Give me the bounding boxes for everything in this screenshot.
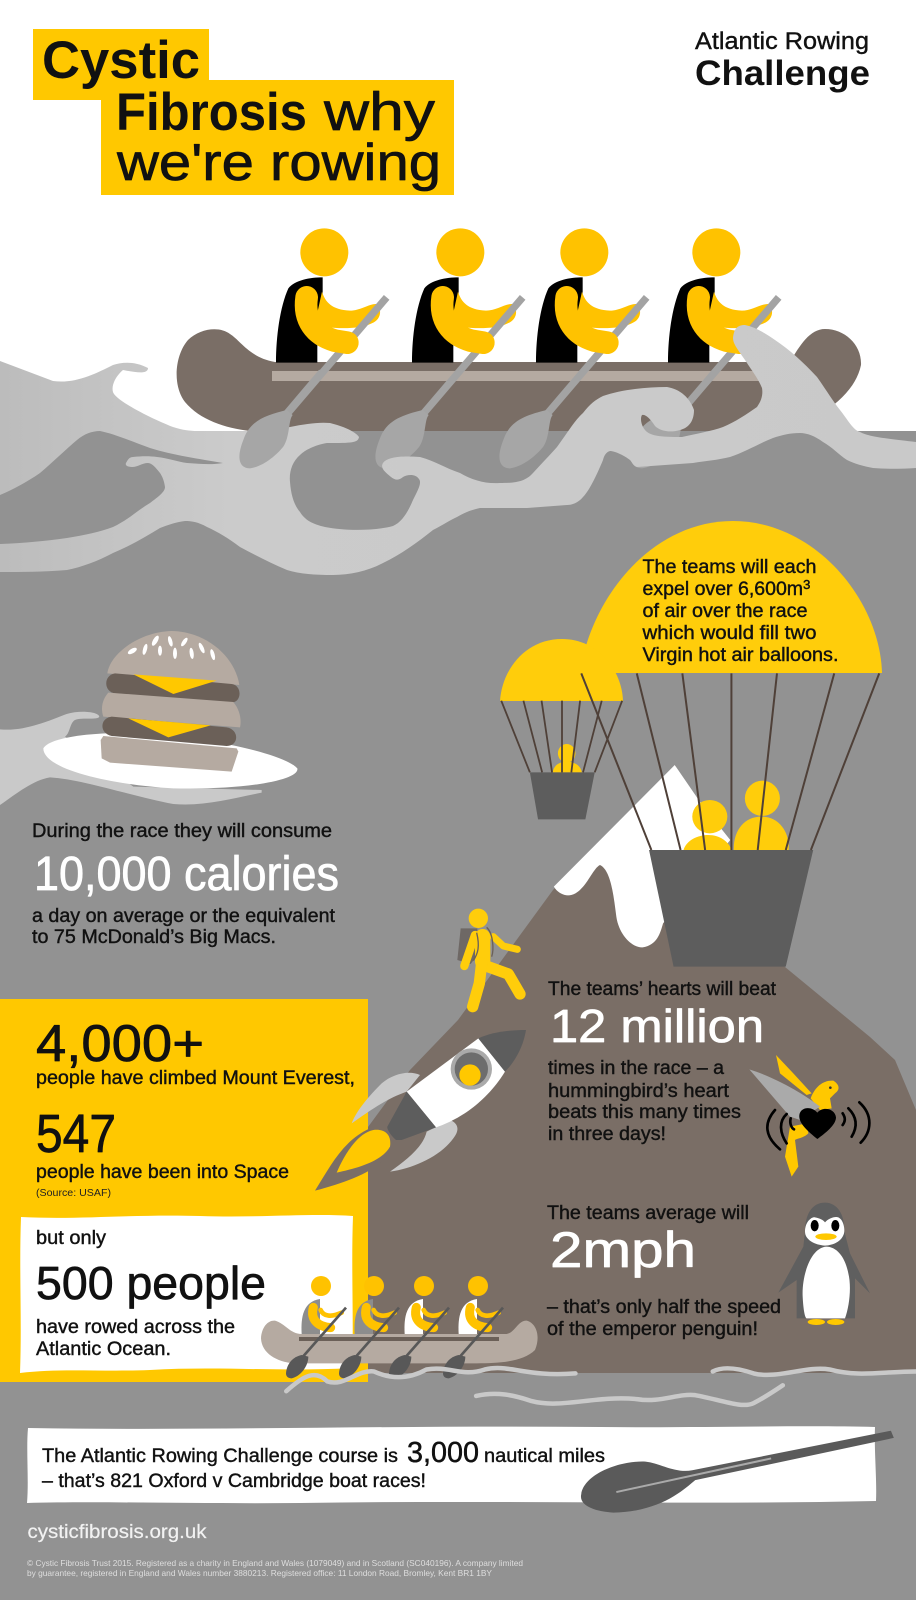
heading: Atlantic Rowing Challenge xyxy=(695,28,870,93)
balloon text: expel over 6,600m xyxy=(642,579,799,600)
panel: course distance banner xyxy=(27,1426,894,1513)
boat bench xyxy=(272,371,762,381)
white note: Atlantic: but only xyxy=(36,1228,107,1249)
text: heart beats: 12 million xyxy=(550,1000,764,1052)
icon: hiker xyxy=(457,909,520,1007)
waves xyxy=(0,325,916,575)
balloon text: Virgin hot air balloons. xyxy=(642,645,838,666)
white note: Atlantic: 500 people xyxy=(36,1257,266,1309)
title: Cystic Fibrosis: Cystic xyxy=(42,31,200,90)
title: why we're rowing xyxy=(116,82,441,192)
text: Everest: 4,000+ xyxy=(36,1015,204,1073)
white note: Atlantic xyxy=(20,1215,353,1373)
small boat with rowers xyxy=(261,1276,538,1378)
text: heart beats: The teams’ hearts will beat xyxy=(548,979,777,1000)
balloon text: The teams will each xyxy=(642,557,816,578)
panel: rowing boat on stormy waves xyxy=(0,228,916,575)
balloon ropes xyxy=(501,673,879,850)
panel: course distance banner: nautical miles xyxy=(484,1446,605,1467)
legal footer: by guarantee, registered in England and Wales number 3880213. Registered office: 11 London Road, Bromley, Kent BR1 1BY xyxy=(27,1568,492,1578)
text: calories xyxy=(32,821,339,948)
big balloon canopy xyxy=(580,521,882,673)
white note: Atlantic: have rowed across the xyxy=(36,1317,235,1338)
text: Everest xyxy=(36,1015,355,1089)
small balloon canopy xyxy=(500,639,623,701)
title block xyxy=(33,29,454,195)
icon: oar xyxy=(581,1431,894,1513)
water ripples xyxy=(286,1368,916,1405)
balloon text: 3 xyxy=(803,577,810,592)
panel: course distance banner: The Atlantic Rowing Challenge course is xyxy=(42,1446,398,1467)
page background xyxy=(0,431,916,1600)
white note: Atlantic: Atlantic Ocean. xyxy=(36,1339,171,1360)
icon: burger on a plate carried by a wave xyxy=(0,631,297,805)
text: speed: – that’s only half the speed xyxy=(547,1297,781,1318)
text: calories: During the race they will consume xyxy=(32,821,332,842)
panel: hot air balloons xyxy=(500,521,882,967)
boat hull xyxy=(177,329,861,431)
title: Cystic Fibrosis: Fibrosis xyxy=(116,83,307,142)
text: heart beats: beats this many times xyxy=(548,1102,741,1123)
legal footer xyxy=(27,1558,523,1578)
text: Everest: people have climbed Mount Everest, xyxy=(36,1068,355,1089)
icon: hummingbird with heart xyxy=(749,1055,869,1177)
text: speed: of the emperor penguin! xyxy=(547,1319,758,1340)
title: why we're rowing: why xyxy=(323,82,435,142)
mountain xyxy=(368,765,916,1373)
text: heart beats: times in the race – a xyxy=(548,1058,724,1079)
icon: rocket xyxy=(315,1030,526,1191)
heading: Atlantic Rowing Challenge: Challenge xyxy=(695,54,870,93)
website: cysticfibrosis.org.uk xyxy=(28,1522,207,1543)
text: speed xyxy=(547,1203,781,1340)
text: calories: 10,000 calories xyxy=(34,848,339,901)
heading: Atlantic Rowing Challenge: Atlantic Rowing xyxy=(695,28,869,55)
mountain snow xyxy=(554,765,730,947)
balloon text: which would fill two xyxy=(641,623,816,644)
panel: course distance banner: – that’s 821 Oxford v Cambridge boat races! xyxy=(42,1471,426,1492)
text: heart beats xyxy=(548,979,777,1145)
title: Cystic Fibrosis xyxy=(42,31,307,142)
text: Space xyxy=(36,1104,289,1199)
text: Space: people have been into Space xyxy=(36,1162,289,1183)
text: speed: 2mph xyxy=(550,1222,696,1278)
text: heart beats: in three days! xyxy=(548,1124,666,1145)
panel: course distance banner: 3,000 xyxy=(407,1437,479,1469)
balloon text: of air over the race xyxy=(642,601,808,622)
text: heart beats: hummingbird’s heart xyxy=(548,1081,730,1102)
paddle blade in front of wave xyxy=(239,372,322,468)
balloon text xyxy=(641,557,838,666)
balloon baskets xyxy=(530,772,813,967)
panel: comparison yellow box xyxy=(0,999,368,1382)
text: calories: to 75 McDonald’s Big Macs. xyxy=(32,927,276,948)
text: speed: The teams average will xyxy=(547,1203,749,1224)
text: Space: 547 xyxy=(36,1104,116,1164)
text: calories: a day on average or the equivalent xyxy=(32,906,336,927)
icon: penguin xyxy=(778,1203,870,1325)
rowers xyxy=(276,228,779,468)
legal footer: © Cystic Fibrosis Trust 2015. Registered as a charity in England and Wales (1079049) and in Scotland (SC040196). A company limited xyxy=(27,1558,523,1568)
balloon people xyxy=(553,744,789,850)
text: Space: (Source: USAF) xyxy=(36,1187,111,1199)
title: why we're rowing: we're rowing xyxy=(116,134,441,192)
